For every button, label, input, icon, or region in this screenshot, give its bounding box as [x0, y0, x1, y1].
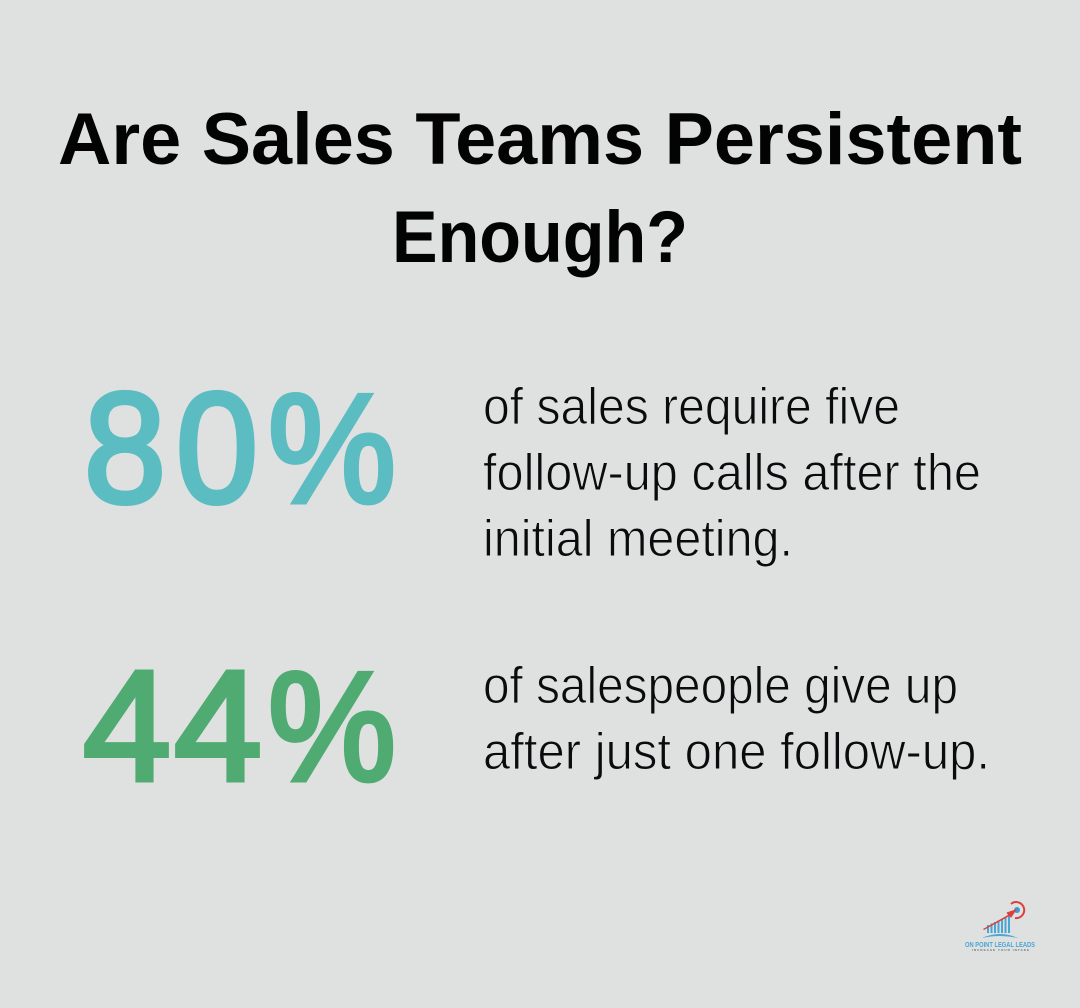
stat: 80%: 8	[84, 361, 166, 536]
icon: target	[1011, 902, 1024, 918]
title: Are Sales Teams Persistent	[58, 99, 1022, 180]
text: 44% description	[483, 657, 990, 781]
title	[58, 99, 1022, 278]
stat: 44%: %	[268, 640, 396, 813]
icon: red arrow	[983, 909, 1017, 930]
text: 80% description: follow-up calls after the	[483, 444, 981, 502]
logo: On Point Legal Leads	[965, 902, 1035, 952]
text: 44% description: after just one follow-up.	[483, 723, 990, 781]
icon: rising bars	[982, 916, 1018, 938]
text: 44% description: of salespeople give up	[483, 657, 958, 715]
text: 80% description: initial meeting.	[483, 510, 793, 568]
text: 80% description	[483, 378, 981, 568]
title: Enough?	[392, 197, 688, 278]
logo tagline: INCREASE YOUR INTAKE	[972, 948, 1029, 952]
stat: 44%: 4	[174, 639, 262, 814]
logo wordmark: ON POINT LEGAL LEADS	[965, 940, 1035, 949]
stat: 44%: 4	[83, 639, 171, 814]
stat: 80%: 0	[176, 361, 258, 536]
text: 80% description: of sales require five	[483, 378, 900, 436]
stat: 80%: %	[268, 362, 396, 535]
